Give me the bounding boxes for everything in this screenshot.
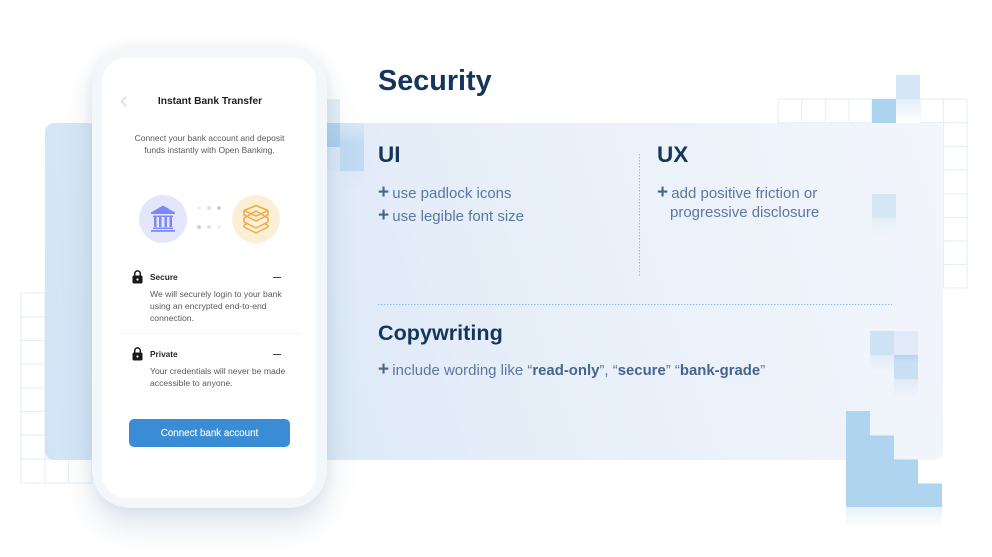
decorative square: above grid bbox=[896, 75, 920, 99]
description: Your credentials will never be made bbox=[150, 366, 285, 376]
icon: bank bbox=[139, 195, 187, 243]
decorative square: beside phone top bbox=[317, 99, 340, 123]
label: Secure bbox=[150, 272, 178, 282]
accordion item: private bbox=[132, 347, 285, 388]
vertical dotted divider bbox=[639, 154, 640, 276]
phone mockup bbox=[92, 48, 327, 508]
list item: progressive disclosure bbox=[670, 204, 819, 220]
description: connection. bbox=[150, 313, 194, 323]
connection dots bbox=[197, 206, 221, 229]
phone intro text bbox=[135, 133, 284, 155]
phone intro text: Connect your bank account and deposit bbox=[135, 133, 284, 143]
collapse icon bbox=[273, 354, 281, 355]
section: UX bbox=[657, 142, 819, 220]
main panel bbox=[45, 123, 943, 460]
decorative squares: beside phone over panel bbox=[327, 123, 364, 171]
icon: padlock bbox=[132, 347, 142, 360]
decorative square: blue in grid bbox=[872, 99, 896, 123]
horizontal dotted divider bbox=[378, 304, 892, 305]
heading: UI bbox=[378, 142, 400, 167]
heading: UX bbox=[657, 142, 688, 167]
phone title: Instant Bank Transfer bbox=[158, 96, 262, 107]
description bbox=[150, 289, 282, 323]
phone intro text: funds instantly with Open Banking. bbox=[144, 145, 275, 155]
description: accessible to anyone. bbox=[150, 378, 233, 388]
decorative square: panel right bbox=[872, 194, 896, 224]
collapse icon bbox=[273, 276, 281, 278]
list item: + include wording like “read-only”, “secure” “bank-grade” bbox=[378, 359, 765, 380]
section: UI bbox=[378, 142, 524, 226]
decorative square: fading reflection bbox=[896, 99, 920, 123]
decorative staircase bbox=[846, 411, 942, 521]
description: We will securely login to your bank bbox=[150, 289, 282, 299]
connect button: Connect bank account bbox=[161, 428, 258, 439]
phone back chevron bbox=[120, 96, 127, 107]
heading: Copywriting bbox=[378, 320, 503, 345]
connect button bbox=[129, 419, 290, 447]
accordion item: secure bbox=[132, 270, 282, 323]
phone screen bbox=[102, 58, 316, 498]
divider bbox=[120, 332, 299, 334]
list item: + use padlock icons bbox=[378, 182, 512, 202]
icon: layered stack bbox=[232, 195, 280, 243]
title: Security bbox=[378, 65, 492, 97]
description: using an encrypted end-to-end bbox=[150, 301, 267, 311]
description bbox=[150, 366, 285, 388]
list item: + add positive friction or bbox=[657, 182, 817, 202]
list item bbox=[657, 182, 819, 220]
label: Private bbox=[150, 349, 178, 359]
icon: padlock bbox=[132, 270, 142, 284]
background grid: bottom left bbox=[21, 293, 92, 483]
section: copywriting bbox=[378, 320, 765, 380]
decorative squares: panel lower right bbox=[870, 331, 918, 388]
list item: + use legible font size bbox=[378, 204, 524, 226]
